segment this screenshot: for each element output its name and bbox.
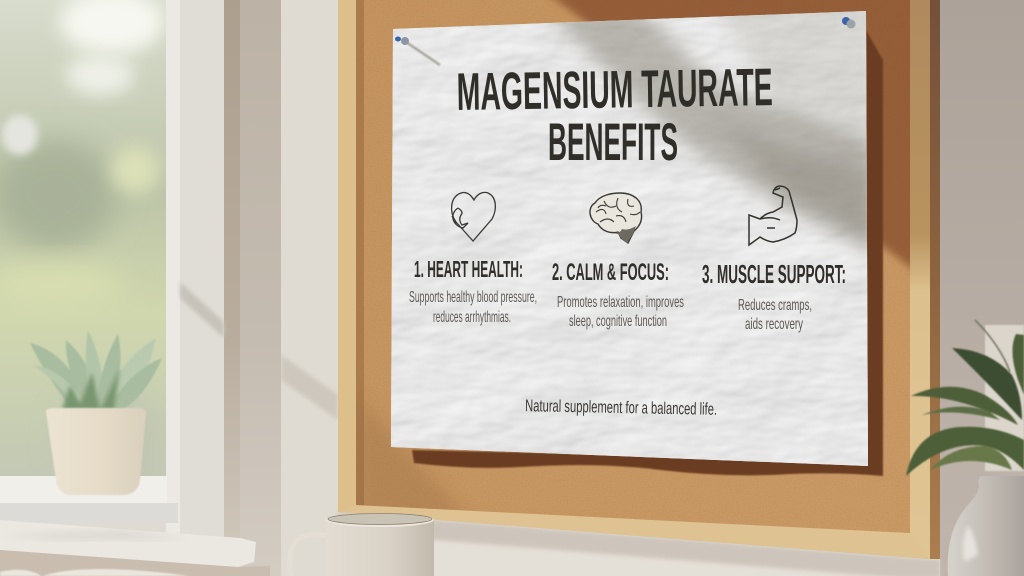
window frame bbox=[0, 0, 270, 576]
title: BENEFITS bbox=[548, 113, 678, 172]
column 3: muscle support bbox=[702, 186, 846, 333]
heading: heart health: 1. HEART HEALTH: bbox=[414, 256, 523, 282]
description: heart health: Supports healthy blood pressure, bbox=[409, 289, 537, 306]
coffee mug bbox=[290, 513, 434, 576]
icon: flexed arm bbox=[749, 186, 797, 245]
description: calm and focus: Promotes relaxation, improves bbox=[557, 294, 684, 311]
footer note: Natural supplement for a balanced life. bbox=[525, 396, 717, 419]
description: heart health: reduces arrhythmias. bbox=[433, 309, 511, 326]
description: muscle support: Reduces cramps, bbox=[738, 297, 812, 314]
title bbox=[456, 58, 773, 172]
description: muscle support: aids recovery bbox=[745, 316, 803, 333]
vase plant bbox=[906, 320, 1024, 576]
open book bbox=[0, 569, 190, 576]
potted plant bbox=[30, 330, 162, 495]
icon: heart bbox=[452, 192, 495, 241]
description: calm and focus bbox=[557, 294, 684, 330]
pin top left bbox=[395, 36, 409, 45]
heading: calm and focus: 2. CALM & FOCUS: bbox=[552, 259, 669, 286]
window view: blurred garden bbox=[0, 0, 166, 490]
heading: muscle support: 3. MUSCLE SUPPORT: bbox=[702, 259, 846, 289]
notice board frame bbox=[338, 0, 940, 559]
pin top right bbox=[842, 17, 856, 28]
description: calm and focus: sleep, cognitive function bbox=[569, 313, 667, 330]
column 2: calm and focus bbox=[552, 193, 684, 330]
cork surface bbox=[356, 0, 930, 533]
paper shadow on cork bbox=[412, 30, 883, 476]
description: muscle support bbox=[738, 297, 812, 333]
icon: brain bbox=[590, 193, 642, 243]
column 1: heart health bbox=[409, 192, 537, 326]
description: heart health bbox=[409, 289, 537, 326]
paper poster bbox=[385, 5, 875, 475]
